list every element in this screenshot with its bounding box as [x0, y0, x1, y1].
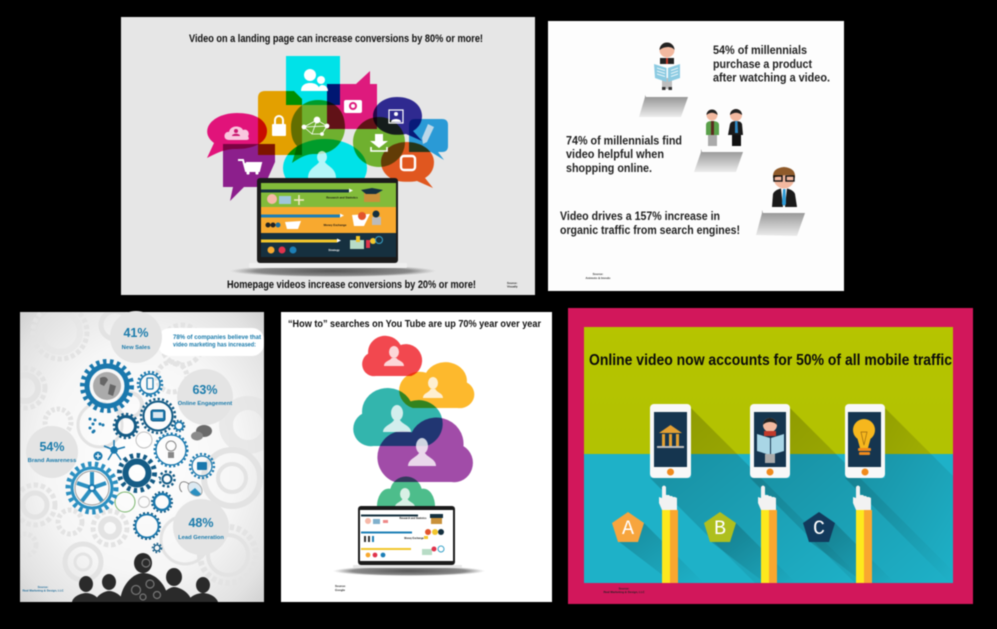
- audience silhouettes: [72, 553, 218, 602]
- cloud person icons: [383, 346, 443, 507]
- source note: Real Marketing & Design, LLC: [603, 590, 645, 594]
- icon: camera: [344, 100, 362, 113]
- phone: person reading: [750, 404, 790, 478]
- gear: phone: [138, 372, 162, 396]
- heading: mobile traffic: Online video now accounts for 50% of all mobile traffic: [589, 352, 952, 369]
- icon: dots: [88, 418, 104, 434]
- laptop with dashboard: Research and Statistics: [400, 517, 427, 520]
- stat bubble: 54% brand awareness: Brand Awareness: [28, 458, 76, 464]
- laptop with dashboard: Strategy: [328, 248, 340, 252]
- long shadows: [618, 408, 953, 583]
- pale background gears: [21, 313, 262, 581]
- figure: man with glasses: [772, 167, 797, 207]
- stat bubble: 41% new sales: New Sales: [122, 345, 150, 351]
- callout: 78% of companies: video marketing has increased:: [173, 342, 256, 348]
- gear: camera: [190, 454, 214, 478]
- small gears: [114, 414, 184, 512]
- statistic: 74%: shopping online.: [566, 163, 652, 175]
- icon: portrait frame: [389, 110, 403, 123]
- stat bubble: 54% brand awareness: [26, 426, 78, 478]
- statistic: 157%: Video drives a 157% increase in: [560, 211, 720, 223]
- icon: chat bubbles: [191, 425, 212, 440]
- statistic: 54%: purchase a product: [713, 59, 812, 71]
- icon: bulb: [853, 419, 875, 455]
- panel: gears and marketing results: [5, 305, 270, 602]
- pointing hand and arm 1: [659, 486, 678, 583]
- callout: 78% of companies: 78% of companies believe that: [173, 334, 262, 341]
- source note: Source:: [619, 586, 629, 590]
- platform: [694, 149, 743, 172]
- icon: tablet: [401, 156, 415, 170]
- blue gear cluster: [68, 362, 214, 552]
- stat bubble: 63% online engagement: [177, 369, 233, 425]
- overlapping clouds: [352, 335, 476, 507]
- icon: padlock: [272, 116, 286, 136]
- panel: millennials: [548, 21, 844, 291]
- source note: Real Marketing & Design, LLC: [22, 588, 64, 592]
- stat bubble: 48% lead generation: 48%: [188, 516, 214, 530]
- gear: globe: [82, 362, 132, 410]
- figures: two people: [706, 109, 743, 146]
- source note: Source:: [593, 272, 603, 276]
- heading: how to searches: “How to” searches on You Tube are up 70% year over year: [288, 318, 541, 330]
- panel: how-to searches: [281, 312, 552, 602]
- dashboard icons: [364, 514, 444, 557]
- pentagon B: B: [714, 518, 726, 541]
- gear: light bulb: [154, 434, 188, 466]
- heading: homepage video: Homepage videos increase conversions by 20% or more!: [227, 279, 476, 291]
- statistic: 54%: after watching a video.: [713, 72, 830, 84]
- statistic: 74%: video helpful when: [566, 149, 664, 161]
- icon: plus: [94, 452, 102, 460]
- gear: big wheel: [68, 464, 116, 512]
- icon: mouse: [180, 479, 205, 499]
- icon: star node: [104, 440, 125, 460]
- speech bubble cluster: [207, 56, 448, 201]
- stat bubble: 41% new sales: 41%: [123, 326, 149, 340]
- dashboard icons: [266, 188, 383, 254]
- phone: bank: [650, 404, 691, 478]
- source note: Source:: [335, 584, 346, 588]
- pentagon A: A: [622, 518, 634, 541]
- stat bubble: 41% new sales: [110, 311, 162, 363]
- source note: Visually: [507, 284, 518, 288]
- panel: landing page conversions: [121, 17, 535, 295]
- laptop with dashboard: Money Exchange: [324, 223, 347, 227]
- source note: Google: [335, 588, 345, 592]
- laptop with dashboard: Money Exchange: [404, 537, 424, 540]
- icon: network nodes: [302, 117, 329, 136]
- phone: light bulb: [845, 404, 885, 478]
- pointing hand and arm 2: [758, 486, 777, 583]
- gear: dark: [120, 456, 154, 490]
- pentagon C: C: [813, 518, 825, 541]
- laptop with dashboard: Research and Statistics: [326, 196, 358, 200]
- stat bubble: 48% lead generation: [173, 499, 229, 555]
- heading: landing page video: Video on a landing page can increase conversions by 80% or more!: [189, 33, 483, 45]
- laptop with dashboard: [230, 178, 436, 277]
- icon: shopping cart: [238, 160, 261, 175]
- gear: monitor: [141, 399, 175, 433]
- icon: cloud user: [224, 126, 249, 140]
- stat bubble: 48% lead generation: Lead Generation: [178, 535, 224, 541]
- stat bubble: 54% brand awareness: 54%: [39, 440, 65, 454]
- source note: Source:: [38, 585, 48, 589]
- pentagon C: [803, 512, 835, 542]
- icon: bank building: [657, 425, 684, 448]
- icon: users: [301, 69, 328, 91]
- icon: download tray: [370, 134, 388, 151]
- stat bubble: 63% online engagement: 63%: [192, 383, 218, 397]
- icon: reader: [757, 418, 784, 463]
- stat bubble: 63% online engagement: Online Engagement: [178, 401, 232, 407]
- platform: [639, 95, 688, 117]
- icon: person silhouette: [308, 151, 336, 178]
- statistic: 74%: 74% of millennials find: [566, 136, 682, 148]
- laptop with dashboard: [333, 506, 485, 576]
- platform: [756, 210, 805, 236]
- source note: Source:: [507, 281, 517, 285]
- source note: Animoto & Invodo: [586, 276, 611, 280]
- statistic: 54%: 54% of millennials: [713, 45, 807, 57]
- pentagon A: [612, 512, 644, 542]
- pointing hand and arm 3: [853, 486, 872, 583]
- pentagon B: [704, 512, 736, 542]
- figure: person reading newspaper: [654, 42, 680, 90]
- small gears lower: [134, 472, 174, 552]
- icon: pencil: [422, 124, 434, 144]
- panel: mobile traffic: [568, 308, 973, 604]
- callout: 78% of companies: [158, 328, 264, 356]
- statistic: 157%: organic traffic from search engines!: [560, 225, 740, 237]
- bubble icons: [224, 69, 434, 178]
